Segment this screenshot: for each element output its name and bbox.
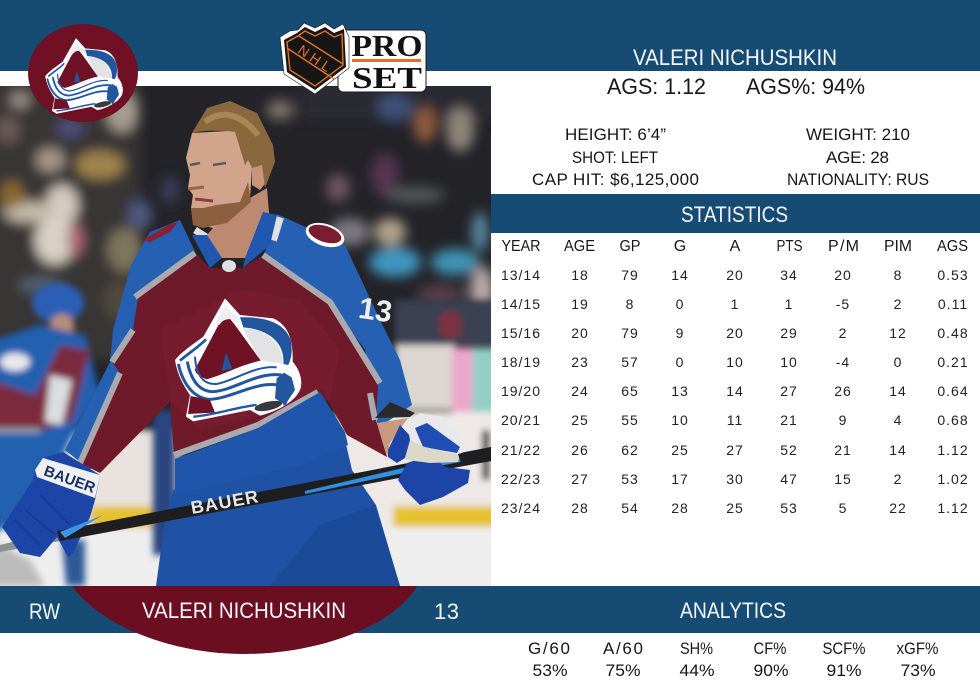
row 14/15: -5 (836, 296, 850, 312)
table header: A (730, 238, 741, 255)
CF%: 90% (754, 661, 788, 680)
row 19/20: 26 (834, 383, 852, 399)
background player (0, 283, 175, 586)
bio left column (532, 125, 699, 189)
bio left column: SHOT: LEFT (572, 148, 658, 167)
row 22/23: 27 (571, 471, 589, 487)
Avalanche team logo badge (28, 24, 138, 122)
A/60: A/60 (603, 639, 643, 658)
SCF%: 91% (826, 661, 862, 680)
row 18/19 (501, 354, 969, 370)
position: RW (29, 599, 60, 624)
row 22/23: 47 (780, 471, 798, 487)
row 15/16: 9 (676, 325, 684, 341)
bio left column: CAP HIT: $6,125,000 (532, 170, 699, 189)
row 18/19: 57 (621, 354, 639, 370)
row 15/16: 0.48 (937, 325, 969, 341)
bio right column: WEIGHT: 210 (806, 125, 910, 144)
A/60: 75% (606, 661, 640, 680)
table header: PTS (776, 238, 802, 255)
row 13/14: 0.53 (937, 267, 969, 283)
stick over right glove (458, 447, 491, 466)
row 13/14: 8 (894, 267, 902, 283)
table header (502, 238, 968, 255)
SET text: SET (352, 60, 422, 95)
xGF% (896, 639, 938, 680)
row 19/20: 14 (726, 383, 744, 399)
ear (252, 165, 264, 190)
chest logo (175, 298, 301, 421)
row 14/15: 1 (785, 296, 793, 312)
row 23/24: 54 (621, 500, 639, 516)
row 23/24: 23/24 (501, 500, 541, 516)
right glove (375, 402, 470, 505)
row 20/21: 25 (571, 412, 589, 428)
neck (207, 188, 270, 258)
NHL shield (280, 23, 349, 94)
statistics bar (491, 194, 980, 233)
row 18/19: 0 (894, 354, 902, 370)
row 18/19: -4 (836, 354, 850, 370)
table header: YEAR (502, 238, 540, 255)
row 18/19: 23 (571, 354, 589, 370)
row 13/14: 79 (621, 267, 639, 283)
bio left column: HEIGHT: 6’4” (565, 125, 666, 144)
row 22/23: 22/23 (501, 471, 541, 487)
row 19/20: 27 (780, 383, 798, 399)
analytics values (528, 639, 938, 680)
row 23/24: 25 (726, 500, 744, 516)
row 21/22: 62 (621, 442, 639, 458)
row 13/14: 20 (834, 267, 852, 283)
row 20/21: 0.68 (937, 412, 969, 428)
row 19/20: 0.64 (937, 383, 969, 399)
hockey stick: BAUER (189, 486, 261, 518)
row 14/15: 14/15 (501, 296, 541, 312)
A/60 (603, 639, 643, 680)
row 19/20 (501, 383, 969, 399)
row 15/16: 12 (889, 325, 907, 341)
table header: P/M (828, 238, 859, 255)
row 15/16: 15/16 (501, 325, 541, 341)
row 22/23: 30 (726, 471, 744, 487)
maroon name arc (72, 586, 417, 654)
face (186, 130, 252, 228)
AGS percent: AGS%: 94% (746, 74, 865, 99)
row 21/22: 21 (834, 442, 852, 458)
AGS score: AGS: 1.12 (607, 74, 706, 99)
CF% (754, 639, 788, 680)
row 19/20: 13 (671, 383, 689, 399)
row 13/14 (501, 267, 969, 283)
row 23/24 (501, 500, 969, 516)
row 18/19: 10 (726, 354, 744, 370)
player photo (0, 86, 491, 586)
table header: AGS (937, 238, 968, 255)
row 14/15 (501, 296, 968, 312)
SCF% (822, 639, 866, 680)
G/60: 53% (532, 661, 568, 680)
row 15/16: 20 (571, 325, 589, 341)
row 21/22: 25 (671, 442, 689, 458)
row 20/21 (501, 412, 969, 428)
bio right column: AGE: 28 (826, 148, 889, 167)
lower arena: boards and ice (0, 296, 491, 586)
row 14/15: 0 (676, 296, 684, 312)
xGF%: xGF% (896, 639, 938, 658)
beard (191, 182, 251, 228)
analytics heading: ANALYTICS (680, 598, 786, 623)
Pro Set white plate (338, 30, 426, 92)
row 20/21: 10 (671, 412, 689, 428)
row 20/21: 11 (727, 412, 743, 428)
row 23/24: 5 (839, 500, 847, 516)
row 18/19: 0.21 (937, 354, 969, 370)
glove body (398, 460, 470, 505)
hockey stick (57, 447, 491, 541)
row 20/21: 9 (839, 412, 847, 428)
table header: G (674, 238, 686, 255)
statistics heading: STATISTICS (681, 202, 788, 227)
row 13/14: 34 (780, 267, 798, 283)
row 14/15: 2 (894, 296, 902, 312)
stick handle behind glove (0, 537, 60, 552)
bio right column: NATIONALITY: RUS (787, 170, 929, 189)
row 13/14: 20 (726, 267, 744, 283)
row 23/24: 1.12 (937, 500, 969, 516)
row 22/23: 1.02 (937, 471, 969, 487)
top blue header band (0, 0, 980, 71)
row 21/22: 1.12 (937, 442, 969, 458)
table header: AGE (564, 238, 595, 255)
row 15/16 (501, 325, 969, 341)
row 20/21: 55 (621, 412, 639, 428)
shield NHL text: NHL (295, 41, 334, 75)
hair (192, 101, 275, 188)
row 19/20: 65 (621, 383, 639, 399)
row 15/16: 2 (839, 325, 847, 341)
SCF%: SCF% (822, 639, 866, 658)
row 20/21: 20/21 (501, 412, 541, 428)
row 22/23: 17 (671, 471, 689, 487)
analytics bar (491, 586, 980, 633)
player: collar and jersey stripes (80, 217, 380, 463)
row 18/19: 0 (676, 354, 684, 370)
SH%: SH% (680, 639, 713, 658)
row 21/22: 26 (571, 442, 589, 458)
row 18/19: 18/19 (501, 354, 541, 370)
left glove: BAUER (42, 463, 98, 497)
row 15/16: 20 (726, 325, 744, 341)
bottom left bar (0, 586, 491, 633)
player: collar (192, 212, 277, 268)
row 21/22 (501, 442, 969, 458)
table header: GP (620, 238, 640, 255)
row 19/20: 14 (889, 383, 907, 399)
row 14/15: 19 (571, 296, 589, 312)
row 14/15: 0.11 (938, 296, 968, 312)
row 23/24: 28 (671, 500, 689, 516)
player: sleeve patches and number: 13 (357, 292, 394, 329)
row 23/24: 22 (889, 500, 907, 516)
facial features (190, 163, 226, 165)
row 21/22: 52 (780, 442, 798, 458)
player: sleeve patches and number (143, 222, 392, 322)
row 14/15: 1 (731, 296, 739, 312)
row 14/15: 8 (626, 296, 634, 312)
row 21/22: 21/22 (501, 442, 541, 458)
SH% (680, 639, 714, 680)
player name header: VALERI NICHUSHKIN (633, 45, 837, 70)
jersey number: 13 (434, 599, 459, 624)
row 20/21: 4 (894, 412, 902, 428)
row 18/19: 10 (780, 354, 798, 370)
CF%: CF% (754, 639, 786, 658)
row 15/16: 79 (621, 325, 639, 341)
player: hem (175, 392, 348, 495)
row 20/21: 21 (780, 412, 798, 428)
row 22/23: 15 (834, 471, 852, 487)
G/60: G/60 (528, 639, 570, 658)
NHL Pro Set logo (280, 23, 426, 95)
bio right column (787, 125, 929, 189)
row 22/23: 2 (894, 471, 902, 487)
row 19/20: 19/20 (501, 383, 541, 399)
row 23/24: 53 (780, 500, 798, 516)
xGF%: 73% (900, 661, 936, 680)
orange rule (352, 59, 421, 62)
shield black (284, 27, 346, 90)
player name bottom: VALERI NICHUSHKIN (142, 598, 346, 623)
left glove (2, 452, 100, 557)
row 22/23: 53 (621, 471, 639, 487)
player: maroon jersey (80, 253, 387, 473)
row 13/14: 18 (571, 267, 589, 283)
PRO text: PRO (352, 28, 422, 63)
row 13/14: 13/14 (501, 267, 541, 283)
player: sleeves and pants (65, 214, 412, 586)
statistics table (501, 238, 969, 516)
row 21/22: 14 (889, 442, 907, 458)
row 21/22: 27 (726, 442, 744, 458)
G/60 (528, 639, 570, 680)
shield orange lines (287, 31, 343, 86)
SH%: 44% (680, 661, 714, 680)
row 19/20: 24 (571, 383, 589, 399)
row 13/14: 14 (671, 267, 689, 283)
arena background (0, 86, 491, 586)
wrist and watch (377, 418, 408, 457)
row 22/23 (501, 471, 969, 487)
table header: PIM (884, 238, 912, 255)
player: neck and head (186, 101, 275, 258)
row 15/16: 29 (780, 325, 798, 341)
row 23/24: 28 (571, 500, 589, 516)
